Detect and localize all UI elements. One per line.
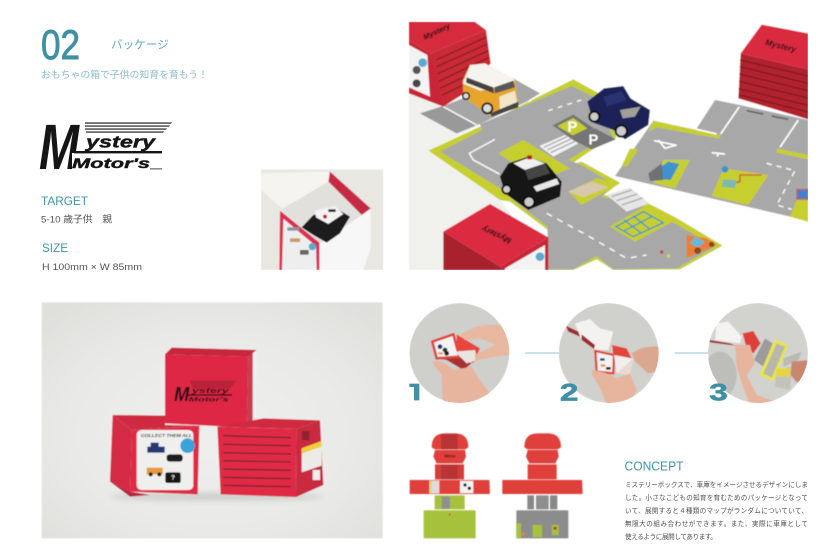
CONCEPT heading: CONCEPT bbox=[624, 460, 684, 474]
photo: stacked boxes: ystery bbox=[190, 386, 230, 395]
concept text: いて、展開すると４種類のマップがランダムについていて、 bbox=[625, 506, 808, 515]
police car bbox=[500, 157, 562, 210]
dieline: map side bbox=[502, 433, 583, 538]
logo: Mystery Motor's: ystery bbox=[85, 134, 156, 152]
step 1 photo bbox=[409, 303, 510, 405]
step number 3: 3 bbox=[709, 379, 728, 406]
TARGET heading: TARGET bbox=[41, 194, 88, 208]
photo: map play scene bbox=[409, 21, 808, 270]
photo: stacked boxes: Motor's bbox=[189, 397, 229, 404]
photo: stacked boxes: ? bbox=[171, 474, 175, 481]
SIZE heading: SIZE bbox=[42, 241, 68, 255]
truck bbox=[587, 86, 650, 139]
photo: map play scene: P bbox=[588, 132, 598, 148]
left map yellow base bbox=[428, 79, 723, 270]
photo: stacked boxes bbox=[42, 302, 383, 538]
section title: バッケージ bbox=[111, 38, 169, 52]
step 3 photo bbox=[703, 303, 808, 405]
step 2 photo bbox=[559, 303, 660, 405]
target text: 5-10 歳子供 親 bbox=[41, 214, 113, 226]
box top right bbox=[741, 25, 808, 69]
right map bbox=[615, 100, 808, 222]
dieline: printed side: Mme bbox=[444, 454, 456, 460]
parking bbox=[553, 115, 594, 140]
box top left bbox=[409, 22, 486, 53]
right box bbox=[218, 418, 320, 429]
step number 2: 2 bbox=[560, 379, 578, 406]
logo: Mystery Motor's bbox=[39, 111, 172, 183]
logo: Mystery Motor's: Motor's bbox=[72, 155, 150, 171]
size text: H 100mm × W 85mm bbox=[42, 262, 142, 273]
dieline: printed side bbox=[410, 433, 490, 538]
photo: map play scene: Mystery bbox=[480, 224, 513, 246]
concept text: 無限大の組み合わせができます。また、実際に車庫として bbox=[625, 519, 808, 528]
step number 1 bbox=[409, 384, 419, 400]
number 02: 02 bbox=[41, 21, 80, 68]
top box bbox=[165, 348, 257, 357]
left box bbox=[113, 415, 198, 430]
buildings on map bbox=[498, 140, 570, 177]
photo: map play scene: P bbox=[567, 120, 577, 136]
subtitle: おもちゃの箱で子供の知育を育もう！ bbox=[41, 68, 208, 81]
photo: map play scene: Mystery bbox=[764, 37, 798, 54]
dielines bbox=[410, 433, 583, 538]
van bbox=[463, 63, 518, 116]
connector lines bbox=[525, 351, 709, 355]
concept text: した。小さなこどもの知育を育むためのパッケージとなって bbox=[625, 493, 808, 502]
concept text: 使えるように展開してあります。 bbox=[625, 532, 717, 541]
photo: stacked boxes: M bbox=[174, 383, 190, 406]
concept text: ミステリーボックスで、車庫をイメージさせるデザインにしま bbox=[625, 480, 808, 489]
photo: map play scene: Mystery bbox=[422, 21, 452, 42]
box bottom bbox=[443, 204, 548, 267]
step circles bbox=[409, 303, 808, 406]
concept text bbox=[625, 480, 808, 541]
logo: Mystery Motor's: M bbox=[39, 111, 80, 183]
photo: open box with police car bbox=[261, 169, 383, 270]
photo: stacked boxes: COLLECT THEM ALL bbox=[141, 433, 192, 439]
